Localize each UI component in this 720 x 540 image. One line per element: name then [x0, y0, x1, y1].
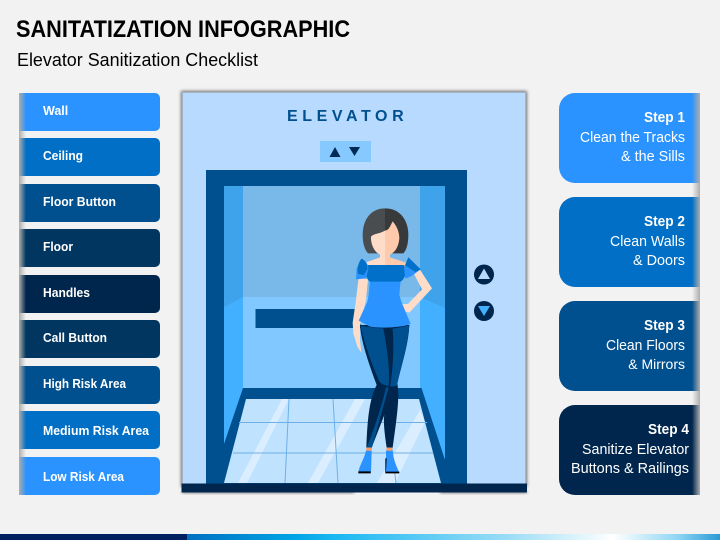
- item: High Risk Area: High Risk Area: [43, 377, 127, 391]
- title: SANITATIZATION INFOGRAPHIC: [16, 16, 350, 43]
- item: Medium Risk Area: Medium Risk Area: [43, 424, 150, 438]
- elevator label: ELEVATOR: [287, 108, 408, 125]
- arms: [353, 277, 368, 353]
- step 4: Step 4: [648, 422, 689, 438]
- elevator cabin: [224, 186, 445, 484]
- legs: [358, 325, 409, 473]
- item: Floor: [19, 229, 160, 267]
- call button up: [474, 264, 494, 284]
- item: Wall: [19, 93, 160, 131]
- panel: elevator illustration: [181, 91, 527, 487]
- panel: left checklist: [19, 93, 160, 495]
- step 4: Buttons & Railings: [571, 461, 689, 477]
- item: Handles: Handles: [43, 286, 90, 300]
- hair: [363, 208, 385, 253]
- shoes: [358, 451, 372, 473]
- elevator threshold: [182, 484, 527, 494]
- upper body: [353, 208, 432, 353]
- step 1: [559, 93, 700, 183]
- woman figure: [353, 208, 432, 473]
- item: Handles: [19, 275, 160, 313]
- handrail: [256, 309, 360, 328]
- item: Low Risk Area: Low Risk Area: [43, 470, 125, 484]
- item: Floor Button: Floor Button: [43, 195, 116, 209]
- step 3: & Mirrors: [628, 356, 685, 372]
- step 2: Step 2: [644, 214, 685, 230]
- panel: right steps: [559, 93, 700, 495]
- item: Wall: Wall: [43, 104, 68, 118]
- item: Ceiling: Ceiling: [43, 149, 83, 163]
- item: Ceiling: [19, 138, 160, 176]
- bottom colour bar: [0, 534, 720, 540]
- item: Call Button: Call Button: [43, 331, 107, 345]
- call button down: [474, 301, 494, 321]
- item: Medium Risk Area: [19, 411, 160, 449]
- face and chest: [365, 231, 385, 268]
- item: Low Risk Area: [19, 457, 160, 495]
- step 1: Clean the Tracks: [580, 130, 685, 146]
- step 4: [559, 405, 700, 495]
- sleeves: [356, 259, 368, 279]
- step 3: Step 3: [644, 318, 685, 334]
- step 2: & Doors: [633, 253, 685, 269]
- top: [359, 280, 411, 328]
- step 3: Clean Floors: [606, 338, 685, 354]
- floor: [224, 388, 445, 484]
- step 1: & the Sills: [621, 149, 685, 165]
- door frame: [206, 170, 467, 484]
- step 4: Sanitize Elevator: [582, 442, 689, 458]
- subtitle: Elevator Sanitization Checklist: [17, 50, 258, 70]
- item: High Risk Area: [19, 366, 160, 404]
- item: Floor Button: [19, 184, 160, 222]
- step 1: Step 1: [644, 110, 685, 126]
- step 2: [559, 197, 700, 287]
- item: Floor: Floor: [43, 240, 73, 254]
- step 3: [559, 301, 700, 391]
- step 2: Clean Walls: [610, 234, 685, 250]
- floor indicator: [320, 141, 371, 162]
- item: Call Button: [19, 320, 160, 358]
